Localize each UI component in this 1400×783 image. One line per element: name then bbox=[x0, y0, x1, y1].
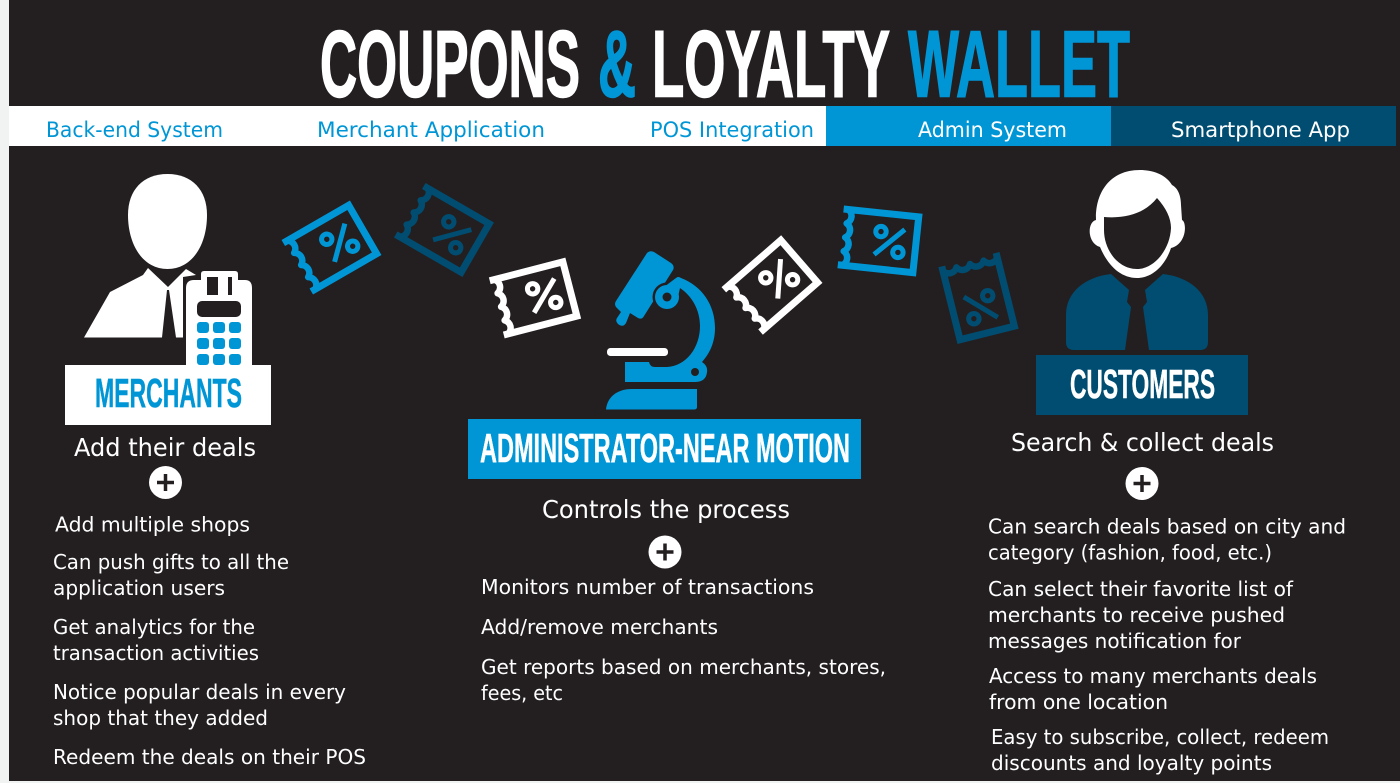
customers features bbox=[988, 514, 1346, 775]
icon: coupon navy right bbox=[942, 253, 1014, 340]
customers label bbox=[1036, 355, 1248, 415]
icon: coupon blue bbox=[283, 205, 377, 291]
customers features: Can select their favorite list of bbox=[988, 577, 1294, 601]
administrator heading: Controls the process bbox=[542, 495, 790, 524]
customers features: Can search deals based on city and bbox=[988, 514, 1346, 538]
navigation band: POS Integration bbox=[650, 118, 814, 143]
merchants features: Notice popular deals in every bbox=[53, 680, 346, 704]
icon: coupon white bbox=[490, 262, 577, 335]
merchants label: MERCHANTS bbox=[95, 370, 242, 416]
panel: customers bbox=[988, 170, 1346, 775]
navigation band: Admin System bbox=[918, 118, 1067, 143]
coupon icons bbox=[283, 186, 1014, 340]
icon: plus bbox=[149, 466, 182, 499]
customers features: discounts and loyalty points bbox=[991, 751, 1272, 775]
administrator features: Get reports based on merchants, stores, bbox=[481, 655, 886, 679]
administrator features: Add/remove merchants bbox=[481, 615, 718, 639]
navigation band: Back-end System bbox=[46, 118, 223, 143]
icon: coupon navy bbox=[396, 186, 489, 272]
merchants features: Add multiple shops bbox=[55, 512, 250, 536]
administrator label bbox=[468, 419, 861, 479]
panel: merchants bbox=[53, 174, 366, 769]
icon: plus bbox=[1126, 467, 1158, 500]
customers features: from one location bbox=[989, 690, 1168, 714]
icon: microscope bbox=[606, 251, 715, 410]
merchants features bbox=[53, 512, 366, 769]
icon: customer bbox=[1066, 170, 1208, 350]
customers features: category (fashion, food, etc.) bbox=[988, 540, 1272, 564]
title: WALLET bbox=[908, 12, 1130, 118]
icon: merchant with payment terminal bbox=[84, 174, 252, 366]
icon: coupon blue right bbox=[838, 209, 919, 273]
administrator label: ADMINISTRATOR-NEAR MOTION bbox=[480, 425, 850, 471]
customers heading: Search & collect deals bbox=[1011, 428, 1274, 457]
title: COUPONS bbox=[320, 12, 580, 118]
merchants features: shop that they added bbox=[53, 706, 268, 730]
administrator features bbox=[481, 575, 886, 705]
icon: plus bbox=[648, 536, 682, 568]
customers features: Access to many merchants deals bbox=[989, 664, 1317, 688]
icon: coupon white tilted bbox=[724, 240, 818, 332]
navigation band: Merchant Application bbox=[317, 118, 545, 143]
merchants features: Get analytics for the bbox=[53, 615, 255, 639]
merchants features: Can push gifts to all the bbox=[53, 550, 289, 574]
merchants features: transaction activities bbox=[53, 641, 259, 665]
customers features: merchants to receive pushed bbox=[988, 603, 1285, 627]
customers label: CUSTOMERS bbox=[1070, 361, 1215, 407]
administrator features: Monitors number of transactions bbox=[481, 575, 814, 599]
administrator features: fees, etc bbox=[481, 681, 563, 705]
title: LOYALTY bbox=[652, 12, 890, 118]
navigation band bbox=[9, 106, 1396, 146]
panel: administrator bbox=[468, 251, 886, 705]
customers features: messages notification for bbox=[988, 629, 1242, 653]
title: & bbox=[598, 12, 636, 118]
customers features: Easy to subscribe, collect, redeem bbox=[991, 725, 1329, 749]
merchants label bbox=[65, 365, 271, 425]
navigation band: Smartphone App bbox=[1171, 118, 1350, 143]
merchants features: application users bbox=[53, 576, 225, 600]
merchants features: Redeem the deals on their POS bbox=[53, 745, 366, 769]
title bbox=[320, 12, 1130, 118]
merchants heading: Add their deals bbox=[74, 433, 256, 462]
